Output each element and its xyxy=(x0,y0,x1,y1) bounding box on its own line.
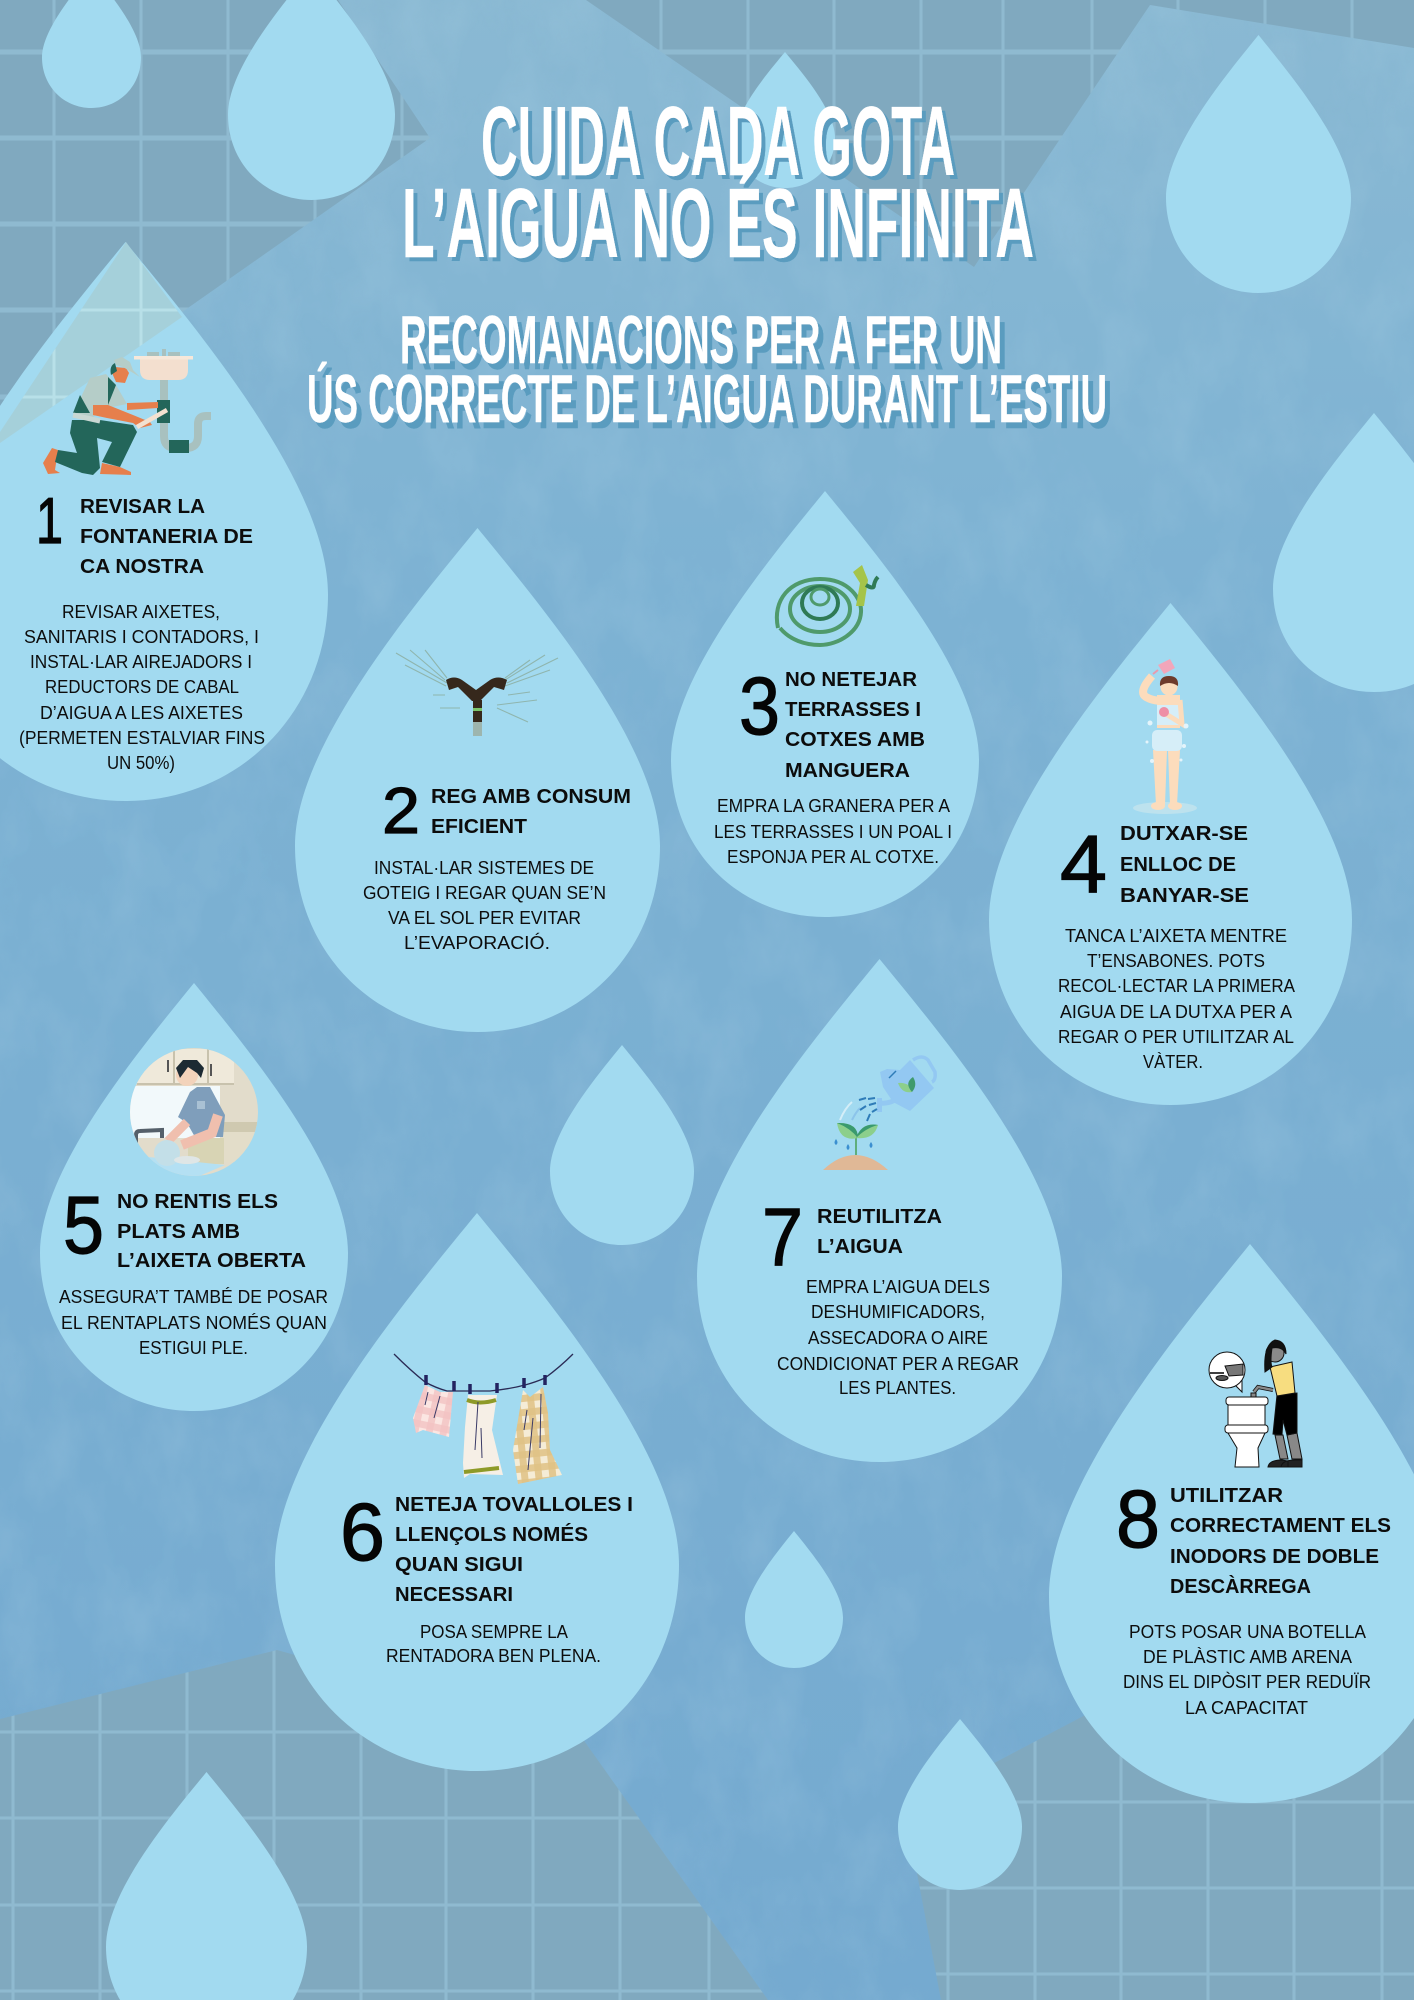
panel: 8 inodors de doble descarrega xyxy=(1049,1244,1414,1803)
heading 8: INODORS DE DOBLE xyxy=(1170,1545,1379,1568)
body 2 xyxy=(363,857,606,953)
title: CUIDA CADA GOTA xyxy=(481,86,955,196)
heading 6 xyxy=(395,1493,633,1606)
heading 6: QUAN SIGUI xyxy=(395,1553,523,1576)
heading 5: NO RENTIS ELS xyxy=(117,1190,278,1213)
heading 5: L’AIXETA OBERTA xyxy=(117,1249,306,1272)
body 1: D’AIGUA A LES AIXETES xyxy=(40,702,243,723)
heading 1: CA NOSTRA xyxy=(80,555,204,578)
body 8: DINS EL DIPÒSIT PER REDUÏR xyxy=(1123,1671,1371,1692)
body 4: AIGUA DE LA DUTXA PER A xyxy=(1060,1001,1293,1022)
heading 4: DUTXAR-SE xyxy=(1120,822,1248,845)
body 6: POSA SEMPRE LA xyxy=(420,1621,569,1642)
heading 2 xyxy=(431,785,631,838)
body 1: REDUCTORS DE CABAL xyxy=(45,676,239,697)
body 4: VÀTER. xyxy=(1143,1051,1203,1072)
number 6: 6 xyxy=(340,1487,385,1578)
panel: 5 no rentis els plats xyxy=(40,983,348,1411)
heading 1: REVISAR LA xyxy=(80,495,205,518)
body 7: LES PLANTES. xyxy=(839,1377,956,1398)
heading 3: COTXES AMB xyxy=(785,728,925,751)
body 7: EMPRA L’AIGUA DELS xyxy=(806,1276,990,1297)
body 7 xyxy=(777,1276,1019,1398)
heading 8: DESCÀRREGA xyxy=(1170,1575,1311,1598)
body 8: POTS POSAR UNA BOTELLA xyxy=(1129,1621,1367,1642)
heading 4: ENLLOC DE xyxy=(1120,853,1236,876)
heading 3: MANGUERA xyxy=(785,759,910,782)
body 5: ASSEGURA’T TAMBÉ DE POSAR xyxy=(59,1286,328,1307)
heading 1: FONTANERIA DE xyxy=(80,525,253,548)
panel: 3 no netejar amb manguera xyxy=(671,491,979,917)
body 6: RENTADORA BEN PLENA. xyxy=(386,1645,601,1666)
icon: plumber fixing sink xyxy=(43,349,211,475)
heading 3 xyxy=(785,668,925,782)
heading 2: REG AMB CONSUM xyxy=(431,785,631,808)
subtitle xyxy=(307,302,1107,437)
number 5: 5 xyxy=(63,1180,104,1271)
icon: person flushing toilet xyxy=(1209,1340,1302,1467)
panel: 6 neteja tovalloles xyxy=(275,1213,679,1771)
body 5: EL RENTAPLATS NOMÉS QUAN xyxy=(61,1312,327,1333)
body 3: ESPONJA PER AL COTXE. xyxy=(727,846,939,867)
heading 4 xyxy=(1120,822,1249,907)
body 3: EMPRA LA GRANERA PER A xyxy=(717,795,951,816)
heading 7: REUTILITZA xyxy=(817,1205,942,1228)
body 7: DESHUMIFICADORS, xyxy=(811,1301,985,1322)
body 2: INSTAL·LAR SISTEMES DE xyxy=(374,857,594,878)
icon: towels on clothesline xyxy=(394,1354,573,1484)
number 1: 1 xyxy=(36,484,63,557)
body 3: LES TERRASSES I UN POAL I xyxy=(714,821,952,842)
icon: person showering xyxy=(1133,659,1197,814)
heading 6: NETEJA TOVALLOLES I xyxy=(395,1493,633,1516)
heading 5 xyxy=(117,1190,306,1272)
number 3: 3 xyxy=(739,661,780,752)
body 4: RECOL·LECTAR LA PRIMERA xyxy=(1058,975,1296,996)
icon: sprinkler xyxy=(396,650,558,736)
body 5 xyxy=(59,1286,328,1358)
heading 8: UTILITZAR xyxy=(1170,1484,1283,1507)
number 7: 7 xyxy=(762,1192,803,1283)
heading 5: PLATS AMB xyxy=(117,1220,240,1243)
heading 3: NO NETEJAR xyxy=(785,668,917,691)
heading 1 xyxy=(80,495,253,578)
number 2: 2 xyxy=(382,774,420,847)
heading 7: L’AIGUA xyxy=(817,1235,903,1258)
heading 6: NECESSARI xyxy=(395,1583,513,1606)
heading 2: EFICIENT xyxy=(431,815,527,838)
body 4: TANCA L’AIXETA MENTRE xyxy=(1065,925,1287,946)
heading 3: TERRASSES I xyxy=(785,698,921,721)
body 2: L’EVAPORACIÓ. xyxy=(404,932,550,953)
body 4: T’ENSABONES. POTS xyxy=(1087,950,1265,971)
body 8 xyxy=(1123,1621,1371,1718)
body 1: (PERMETEN ESTALVIAR FINS xyxy=(19,727,265,748)
icon: man washing dishes xyxy=(130,1048,259,1180)
body 3 xyxy=(714,795,952,867)
number 4: 4 xyxy=(1060,819,1107,910)
body 5: ESTIGUI PLE. xyxy=(139,1337,248,1358)
body 2: GOTEIG I REGAR QUAN SE’N xyxy=(363,882,606,903)
panel: 1 revisar la fontaneria xyxy=(0,230,328,801)
icon: garden hose xyxy=(777,565,878,645)
panel: 7 reutilitza l'aigua xyxy=(697,959,1062,1462)
body 6 xyxy=(386,1621,601,1666)
body 1: INSTAL·LAR AIREJADORS I xyxy=(30,651,252,672)
title xyxy=(402,86,1034,278)
body 1 xyxy=(19,601,265,773)
icon: watering can and sprout xyxy=(823,1057,935,1170)
body 8: DE PLÀSTIC AMB ARENA xyxy=(1143,1646,1353,1667)
body 1: SANITARIS I CONTADORS, I xyxy=(24,626,259,647)
body 2: VA EL SOL PER EVITAR xyxy=(388,907,581,928)
body 1: UN 50%) xyxy=(107,752,175,773)
body 8: LA CAPACITAT xyxy=(1185,1697,1308,1718)
body 7: ASSECADORA O AIRE xyxy=(808,1327,988,1348)
heading 7 xyxy=(817,1205,942,1258)
panel: 2 reg amb consum eficient xyxy=(295,528,660,1032)
heading 8 xyxy=(1170,1484,1391,1598)
number 8: 8 xyxy=(1116,1474,1160,1565)
body 1: REVISAR AIXETES, xyxy=(62,601,220,622)
body 4 xyxy=(1058,925,1296,1072)
heading 4: BANYAR-SE xyxy=(1120,884,1249,907)
heading 6: LLENÇOLS NOMÉS xyxy=(395,1523,588,1546)
panel: 4 dutxar-se xyxy=(989,603,1352,1105)
body 4: REGAR O PER UTILITZAR AL xyxy=(1058,1026,1294,1047)
heading 8: CORRECTAMENT ELS xyxy=(1170,1514,1391,1537)
body 7: CONDICIONAT PER A REGAR xyxy=(777,1353,1019,1374)
